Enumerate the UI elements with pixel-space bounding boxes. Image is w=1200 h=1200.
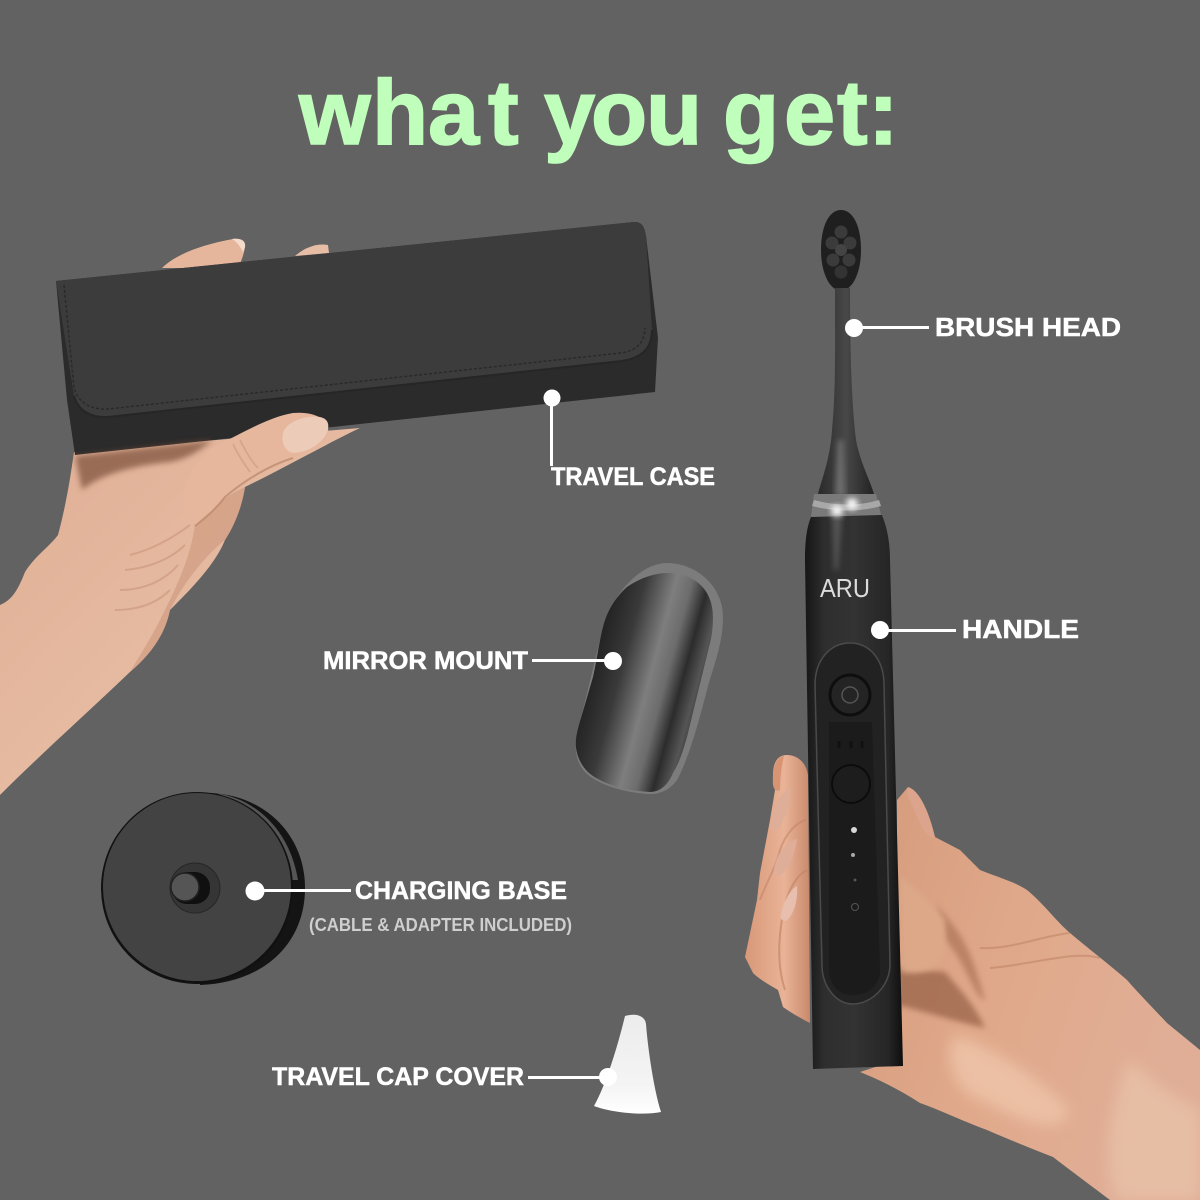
left hand: palm and fingers behind case [0, 239, 360, 795]
label: handle: HANDLE [962, 614, 1079, 644]
brand: ARU [820, 573, 870, 603]
label: handle [871, 614, 1079, 644]
thumb nail [907, 787, 935, 837]
small marks [839, 741, 862, 748]
charging base [101, 792, 305, 985]
mode button [832, 765, 870, 803]
mirror mount [576, 563, 723, 794]
label: charging base: CHARGING BASE [355, 877, 567, 905]
left hand: thumb over case [75, 413, 328, 526]
thumbnail [282, 417, 328, 453]
travel case [56, 222, 658, 455]
control panel [815, 643, 890, 1004]
travel cap cover [594, 1015, 661, 1114]
toothbrush [805, 210, 903, 1069]
light collar [811, 494, 881, 517]
panel inner [829, 722, 880, 995]
label: travel case [544, 390, 715, 491]
charging post [170, 863, 220, 913]
label: mirror mount: MIRROR MOUNT [323, 647, 528, 675]
right hand: palm and thumb [860, 787, 1200, 1200]
indicators [851, 827, 857, 833]
handle body [805, 515, 903, 1069]
power button [830, 675, 870, 715]
label: charging base: (CABLE & ADAPTER INCLUDED) [309, 915, 572, 935]
label: travel case: TRAVEL CASE [551, 463, 715, 491]
brush head [821, 210, 861, 291]
right hand fingers [745, 755, 810, 1023]
label: brush head [845, 312, 1121, 342]
label: travel cap cover: TRAVEL CAP COVER [272, 1063, 524, 1091]
title: what you get: [298, 62, 899, 164]
label: charging base [246, 877, 572, 935]
label: mirror mount [323, 647, 622, 675]
brush neck [818, 288, 874, 494]
label: brush head: BRUSH HEAD [935, 312, 1121, 342]
